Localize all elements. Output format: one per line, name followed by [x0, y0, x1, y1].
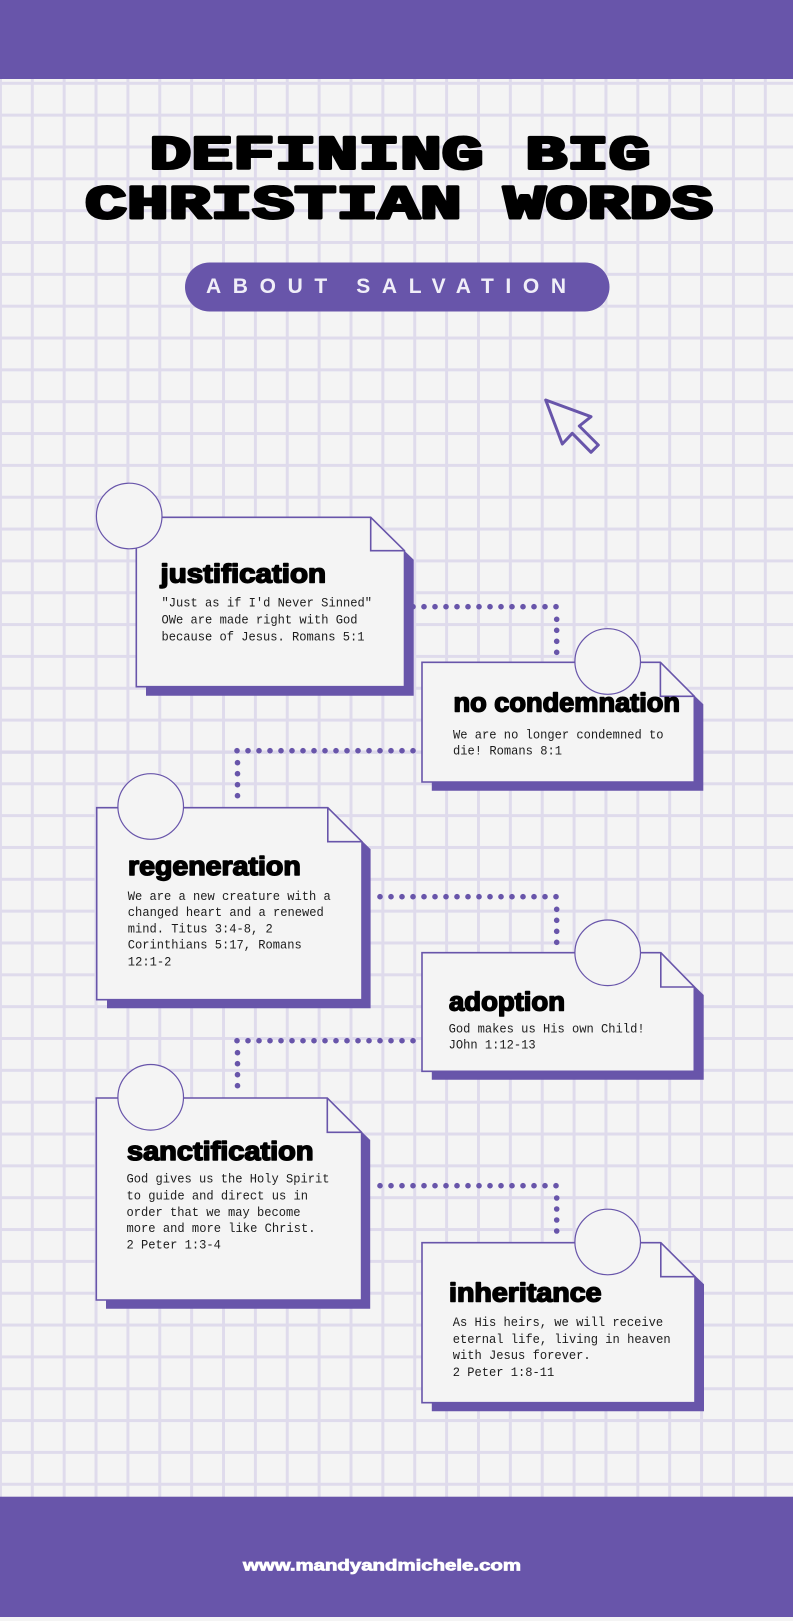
panel: inheritance: eternal life, living in heaven — [453, 1332, 671, 1347]
panel: justification: because of Jesus. Romans 5:1 — [162, 630, 365, 645]
panel: justification: OWe are made right with God — [162, 613, 358, 628]
panel: adoption: JOhn 1:12-13 — [449, 1037, 536, 1052]
panel: regeneration: Corinthians 5:17, Romans — [128, 938, 302, 953]
panel: inheritance: with Jesus forever. — [453, 1348, 591, 1363]
panel: sanctification: order that we may become — [126, 1205, 300, 1220]
subtitle pill — [185, 262, 610, 312]
panel: justification: "Just as if I'd Never Sinned" — [162, 596, 372, 611]
panel: sanctification: sanctification — [127, 1138, 314, 1166]
panel: no condemnation: die! Romans 8:1 — [453, 743, 562, 758]
title: DEFINING BIG — [150, 131, 650, 184]
panel: regeneration: 12:1-2 — [128, 955, 171, 970]
panel: inheritance: inheritance — [449, 1280, 602, 1308]
panel: regeneration: mind. Titus 3:4-8, 2 — [128, 922, 273, 937]
panel: sanctification: 2 Peter 1:3-4 — [126, 1238, 221, 1253]
footer url: www.mandyandmichele.com — [242, 1558, 521, 1575]
panel: adoption: adoption — [449, 989, 565, 1017]
icon: cursor arrow — [546, 400, 598, 452]
panel: regeneration — [97, 774, 371, 1008]
panel: regeneration: regeneration — [128, 853, 301, 881]
dotted connector: regeneration to adoption — [377, 894, 560, 945]
footer band — [0, 1497, 793, 1617]
panel: no condemnation: We are no longer condemned to — [453, 727, 664, 742]
panel: inheritance: As His heirs, we will receive — [453, 1315, 663, 1330]
panel: adoption: God makes us His own Child! — [449, 1021, 645, 1036]
panel: justification — [96, 483, 414, 696]
panel: adoption — [422, 920, 704, 1080]
panel: sanctification: God gives us the Holy Spirit — [126, 1172, 330, 1187]
panel: regeneration: changed heart and a renewed — [128, 905, 324, 920]
dotted connector: no condemnation to regeneration — [234, 748, 416, 798]
title — [85, 131, 713, 233]
title: CHRISTIAN WORDS — [85, 180, 713, 233]
header band — [0, 0, 793, 79]
panel: no condemnation — [422, 629, 703, 791]
subtitle pill: ABOUT SALVATION — [206, 275, 566, 298]
panel: sanctification: to guide and direct us in — [126, 1189, 308, 1204]
panel: justification: justification — [159, 561, 326, 589]
dotted connector: justification to no condemnation — [410, 604, 560, 655]
panel: inheritance: 2 Peter 1:8-11 — [453, 1365, 554, 1380]
panel: sanctification: more and more like Christ. — [126, 1221, 316, 1236]
panel: inheritance — [422, 1209, 704, 1411]
panel: no condemnation: no condemnation — [454, 690, 680, 718]
panel: regeneration: We are a new creature with a — [128, 889, 331, 904]
dotted connector: sanctification to inheritance — [377, 1183, 560, 1234]
panel: sanctification — [96, 1064, 370, 1309]
dotted connector: adoption to sanctification — [234, 1038, 416, 1088]
